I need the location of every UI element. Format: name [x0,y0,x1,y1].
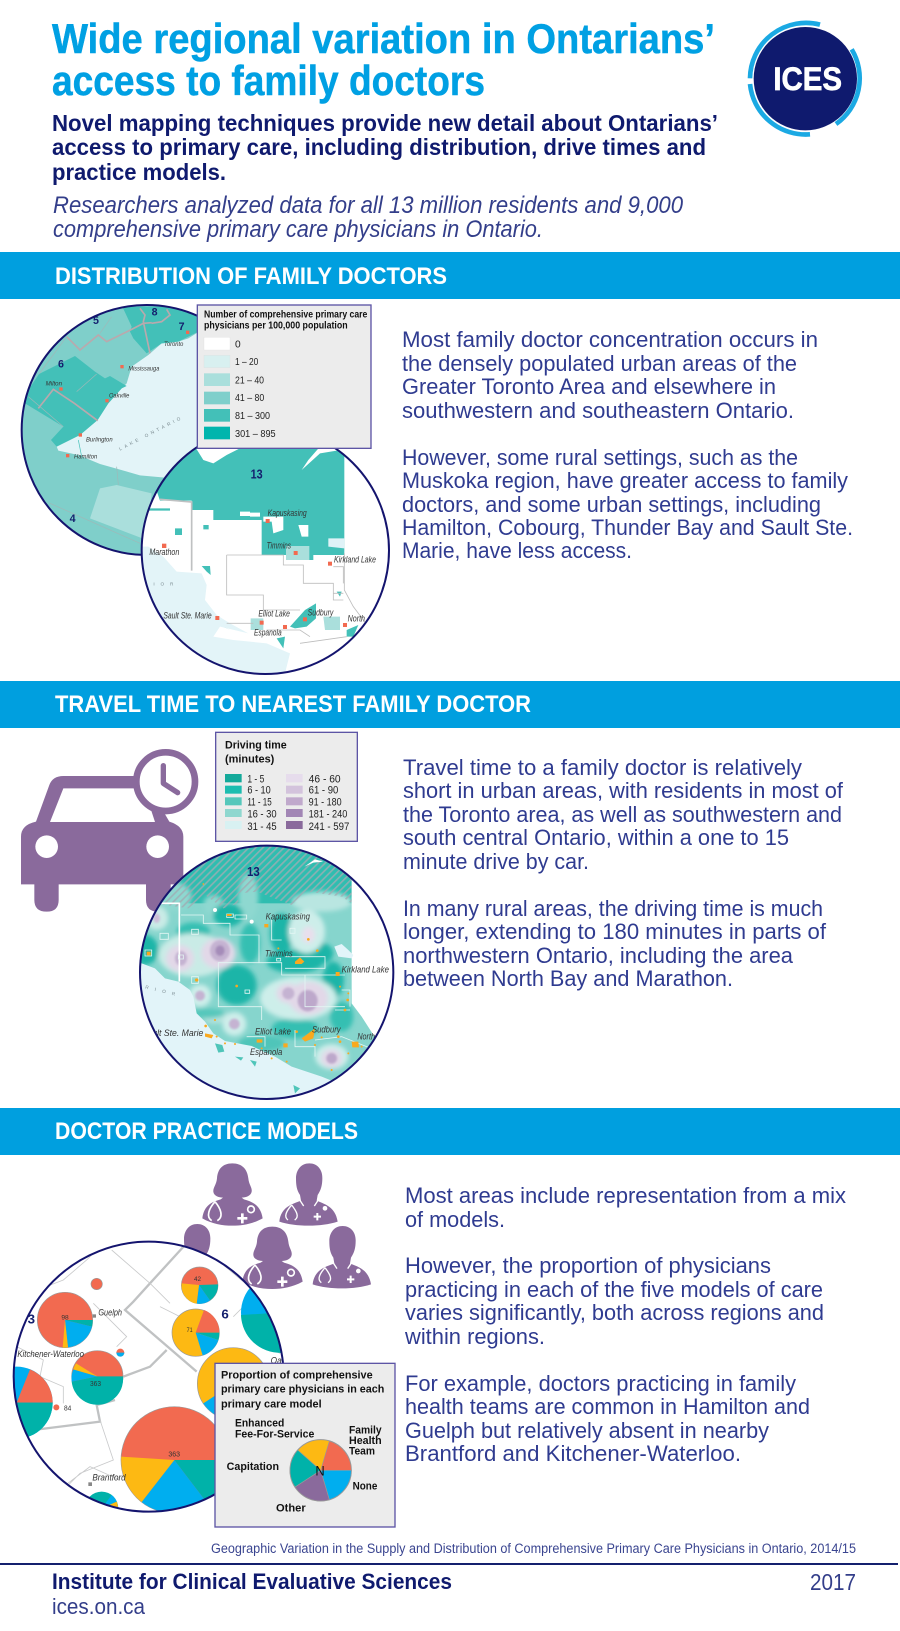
text block: travel time: Travel time to a family doctor is relatively [403,755,802,780]
text block: distribution: However, some rural settings, such as the [402,445,798,470]
text block: travel time: short in urban areas, with residents in most of [403,778,844,803]
map: driving time: Kapuskasing [266,911,310,921]
footer: year: 2017 [810,1569,856,1595]
map: northern Ontario: Espanola [254,628,282,638]
legend: driving time [216,732,357,841]
map: driving time [139,844,394,1100]
text block: travel time: longer, extending to 180 minutes in parts of [403,919,827,944]
legend: physicians per population: 81 – 300 [235,411,270,422]
north teal zone [178,846,352,904]
text block: travel time [403,755,844,991]
legend: practice model proportions: Other [276,1503,306,1515]
map: driving time: Sudbury [312,1025,341,1035]
legend: physicians per population: 0 [235,339,241,350]
map: driving time: North [357,1031,375,1041]
section band: distribution [0,252,900,299]
pie: legend key: N [315,1462,325,1478]
pie: Brantford [90,1492,118,1508]
legend: physicians per population [197,305,371,448]
legend: driving time: 16 - 30 [247,808,277,820]
pie: right region [241,1288,280,1353]
section band: distribution: DISTRIBUTION OF FAMILY DOCTORS [55,263,447,290]
lead text: Researchers analyzed data for all 13 million residents and 9,000 [53,192,684,219]
section band: practice models [0,1108,900,1155]
legend: practice model proportions: Health [349,1435,382,1447]
text block: practice models: practicing in each of the five models of care [405,1277,823,1302]
logo: ICES [750,23,860,134]
icon: car with clock [21,752,195,912]
map: northern Ontario: Timmins [267,540,291,550]
legend: physicians per population: 301 – 895 [235,429,276,440]
map: pie charts by region: 6 [221,1307,229,1322]
text block: practice models: Guelph but relatively absent in nearby [405,1418,769,1443]
section band: travel time: TRAVEL TIME TO NEAREST FAMILY DOCTOR [55,691,531,718]
text block: distribution: doctors, and some urban settings, including [402,492,821,517]
map: Greater Toronto Area: 4 [70,513,76,525]
legend: driving time: 241 - 597 [309,821,349,833]
legend: physicians per population: 21 – 40 [235,375,264,386]
map: Greater Toronto Area: Hamilton [74,453,98,460]
towns [147,914,359,1047]
title: Wide regional variation in Ontarians’ [52,15,715,62]
map: driving time: R I O R [145,984,176,997]
text block: practice models: of models. [405,1207,505,1232]
map: Greater Toronto Area: 6 [58,359,64,371]
legend: physicians per population: Number of comprehensive primary care [204,309,368,320]
legend: driving time: 11 - 15 [247,797,272,809]
legend: driving time: (minutes) [225,754,275,766]
map: northern Ontario: Kapuskasing [268,508,307,518]
section band: practice models: DOCTOR PRACTICE MODELS [55,1118,358,1145]
legend: practice model proportions [215,1363,395,1527]
legend: practice model proportions: Capitation [227,1461,279,1473]
section band: travel time [0,681,900,728]
map: northern Ontario: Elliot Lake [258,609,290,619]
legend: driving time: 46 - 60 [309,773,341,785]
map: driving time: Espanola [250,1047,282,1057]
text block: practice models: Brantford and Kitchener-Waterloo. [405,1441,741,1466]
legend: driving time: Driving time [225,739,287,751]
legend: driving time: 181 - 240 [309,808,347,820]
logo: ICES: ICES [773,61,842,97]
boundaries [158,903,179,982]
text block: distribution: Most family doctor concentration occurs in [402,327,818,352]
lakes and outside area [141,963,331,1098]
map: pie charts by region: 98 [61,1314,69,1321]
footer: organisation [52,1569,452,1619]
panel: distribution maps [0,290,389,680]
map: Greater Toronto Area: 7 [179,321,185,333]
map: northern Ontario [140,446,390,675]
pie: 98 [37,1292,93,1348]
legend: practice model proportions: primary care model [221,1398,322,1410]
map: Greater Toronto Area: Toronto [164,341,184,348]
panel: travel time map [21,732,405,1107]
text block: distribution: southwestern and southeastern Ontario. [402,398,794,423]
map: northern Ontario: North [348,614,365,624]
subtitle [52,110,718,185]
map: northern Ontario: Kirkland Lake [334,554,376,564]
legend: practice model proportions: None [353,1480,377,1492]
map: Greater Toronto Area: LAKE ONTARIO [118,416,182,452]
legend: driving time: 31 - 45 [247,821,277,833]
footer: organisation: Institute for Clinical Evaluative Sciences [52,1569,452,1594]
map: driving time: Kirkland Lake [342,964,389,974]
legend: physicians per population: 1 – 20 [235,357,258,368]
pie: 363 Hamilton [120,1406,214,1510]
text block: travel time: south central Ontario, within a one to 15 [403,825,789,850]
subtitle: Novel mapping techniques provide new detail about Ontarians’ [52,110,718,136]
lead text: comprehensive primary care physicians in Ontario. [53,216,543,243]
map: Greater Toronto Area: Milton [46,381,62,388]
footer: organisation: ices.on.ca [52,1594,146,1619]
text block: practice models [404,1183,846,1466]
map: pie charts by region: Brantford [92,1472,127,1482]
text block: practice models: For example, doctors practicing in family [405,1371,796,1396]
map: northern Ontario: 13 [251,467,263,482]
text block: travel time: In many rural areas, the driving time is much [403,896,823,921]
legend: driving time: 1 - 5 [247,773,264,785]
panel: practice models map [0,1163,395,1527]
legend: physicians per population: 41 – 80 [235,393,264,404]
map: pie charts by region: 363 [90,1379,101,1388]
map: driving time: Elliot Lake [255,1026,291,1036]
title [52,15,715,104]
map: pie charts by region: 84 [64,1403,71,1412]
text block: practice models: Most areas include representation from a mix [405,1183,846,1208]
map: Greater Toronto Area: Burlington [86,436,113,443]
pie: centre region [197,1347,263,1415]
text block: distribution: Greater Toronto Area and elsewhere in [402,374,776,399]
pie: 363 Kitchener-Waterloo [72,1351,123,1405]
text block: practice models: However, the proportion of physicians [405,1253,771,1278]
map: northern Ontario: Sudbury [308,608,334,618]
legend: driving time: 61 - 90 [309,785,338,797]
pie: legend key [290,1440,351,1501]
legend: practice model proportions: primary care physicians in each [221,1384,384,1396]
lead text [53,192,684,243]
text block: distribution: Marie, have less access. [402,538,632,563]
map: Greater Toronto Area [20,304,197,556]
map: pie charts by region: Kitchener-Waterloo [17,1349,84,1359]
map: pie charts by region: Guelph [98,1307,122,1317]
map: Greater Toronto Area: Mississauga [128,365,160,372]
pie: 42 [181,1267,218,1304]
pie: left region [14,1366,53,1436]
text block: distribution: Muskoka region, have greater access to family [402,468,848,493]
source citation: Geographic Variation in the Supply and Distribution of Comprehensive Primary Care Physicians in Ontario, 2014/15 [211,1541,856,1556]
map: pie charts by region: Oa [271,1356,282,1366]
subtitle: practice models. [52,159,226,185]
text block: practice models: health teams are common in Hamilton and [405,1394,810,1419]
map: Greater Toronto Area: Oakville [109,393,130,400]
map: Greater Toronto Area: 8 [152,306,158,318]
text block: travel time: minute drive by car. [403,849,589,874]
map: driving time: 13 [247,864,260,879]
icon: group of doctors [167,1163,371,1289]
map: driving time: Timmins [265,948,293,958]
text block: distribution [402,327,853,563]
text block: travel time: the Toronto area, as well as southwestern and [403,802,842,827]
text block: travel time: between North Bay and Marathon. [403,966,733,991]
legend: driving time: 6 - 10 [247,785,271,797]
legend: practice model proportions: Family [349,1424,382,1436]
hatching [162,846,352,908]
text block: distribution: Hamilton, Cobourg, Thunder Bay and Sault Ste. [402,515,853,540]
pie: 71 [172,1309,219,1356]
map: pie charts by region: 71 [187,1327,193,1334]
map: pie charts by region: 3 [28,1312,35,1327]
legend: practice model proportions: Proportion of comprehensive [221,1369,373,1381]
subtitle: access to primary care, including distribution, drive times and [52,134,706,160]
map: pie charts by region: 363 [168,1450,180,1459]
legend: practice model proportions: Team [349,1446,375,1458]
text block: travel time: northwestern Ontario, including the area [403,943,794,968]
map: pie charts by region [12,1240,284,1513]
map: northern Ontario: Sault Ste. Marie [163,611,212,621]
text block: practice models: within regions. [404,1324,545,1349]
text block: distribution: the densely populated urban areas of the [402,351,797,376]
legend: practice model proportions: Enhanced [235,1418,284,1430]
title: access to family doctors [52,57,485,104]
map: pie charts by region: 42 [194,1276,201,1283]
map: northern Ontario: Marathon [149,547,179,557]
map: northern Ontario: I O R [153,582,174,587]
text block: practice models: varies significantly, both across regions and [405,1300,824,1325]
legend: practice model proportions: Fee-For-Service [235,1428,314,1440]
map: driving time: Sault Ste. Marie [142,1028,203,1038]
legend: driving time: 91 - 180 [309,796,342,808]
map: Greater Toronto Area: 5 [93,315,99,327]
legend: physicians per population: physicians per 100,000 population [204,321,348,332]
